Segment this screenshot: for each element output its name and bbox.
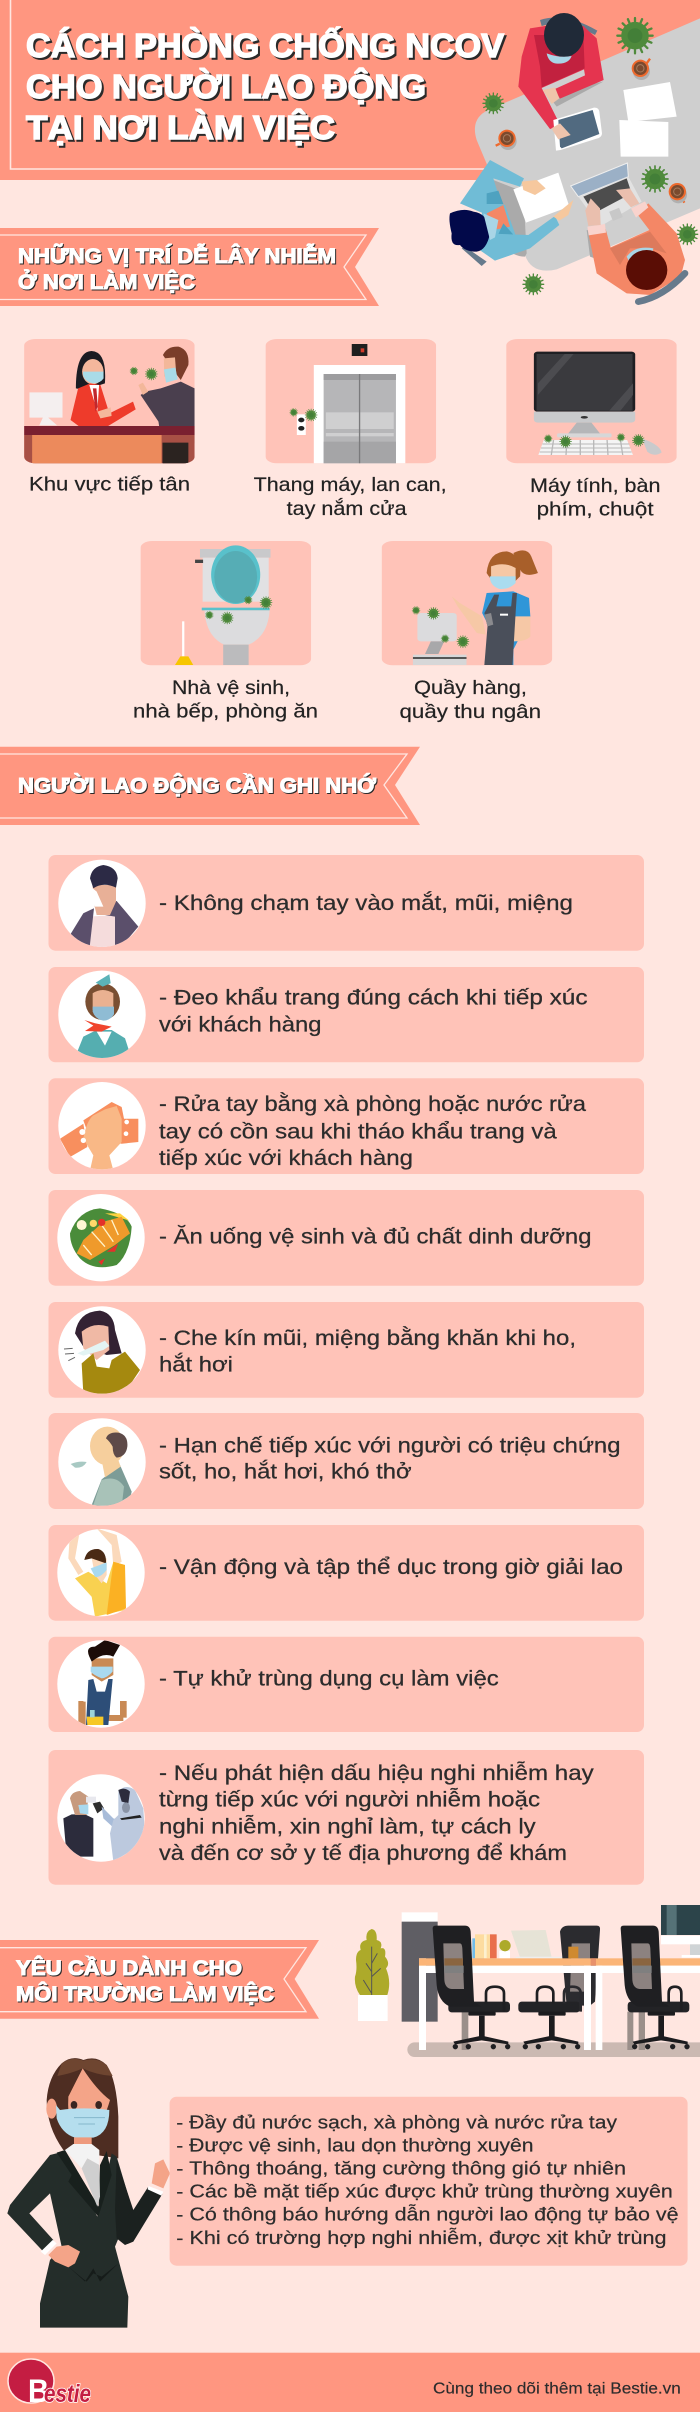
illustration: office desks and chairs [355, 1905, 700, 2057]
footer bar [0, 2353, 700, 2412]
advice text: hắt hơi [159, 1354, 233, 1377]
title: CÁCH PHÒNG CHỐNG NCOV [26, 26, 505, 65]
person in red [518, 13, 604, 151]
icon: man with breath cloud [71, 1427, 132, 1507]
panel: toilet [141, 541, 311, 665]
location captions: nhà bếp, phòng ăn [133, 701, 318, 723]
icon: woman sneezing into tissue [64, 1311, 140, 1394]
location captions: Thang máy, lan can, [254, 474, 447, 496]
ribbon heading: MÔI TRƯỜNG LÀM VIỆC [16, 1982, 274, 2006]
location captions: quầy thu ngân [400, 701, 541, 723]
logo: Bestie: estie [44, 2380, 91, 2408]
ribbon heading: Ở NƠI LÀM VIỆC [18, 270, 195, 294]
requirement list: - Khi có trường hợp nghi nhiễm, được xịt khử trùng [176, 2227, 667, 2248]
advice text: - Không chạm tay vào mắt, mũi, miệng [159, 892, 573, 915]
ribbon heading: NHỮNG VỊ TRÍ DỄ LÂY NHIỄM [18, 244, 336, 268]
reception monitor [29, 392, 62, 425]
receptionist [71, 351, 136, 427]
desk objects [472, 1930, 567, 1958]
advice text: sốt, ho, hắt hơi, khó thở [159, 1461, 412, 1484]
panel: workplace requirements [170, 2097, 688, 2266]
office monitor [661, 1905, 700, 1958]
icon: flight attendant with mask [77, 974, 129, 1063]
papers [619, 82, 677, 157]
requirement list: - Các bề mặt tiếp xúc được khử trùng thường xuyên [176, 2181, 673, 2202]
person in blue with document [449, 160, 573, 266]
panel: cashier [382, 541, 552, 665]
advice text: nghi nhiễm, xin nghỉ làm, tự cách ly [159, 1815, 536, 1838]
advice text: - Hạn chế tiếp xúc với người có triệu chứng [159, 1434, 620, 1457]
illustration: woman in suit with mask [7, 2058, 170, 2328]
ribbon heading [16, 1956, 274, 2006]
chair right [621, 1926, 690, 2049]
panel: computer [506, 339, 677, 463]
ribbon heading [18, 244, 336, 294]
advice text: - Tự khử trùng dụng cụ làm việc [159, 1668, 499, 1691]
section ribbon: workplace requirements [0, 1940, 319, 2019]
advice text: - Vận động và tập thể dục trong giờ giải lao [159, 1556, 623, 1579]
chair middle [518, 1987, 581, 2049]
advice text: - Che kín mũi, miệng bằng khăn khi ho, [159, 1327, 576, 1350]
advice text: - Ăn uống vệ sinh và đủ chất dinh dưỡng [159, 1225, 592, 1248]
icon: temperature check [63, 1787, 145, 1862]
advice text [159, 892, 623, 1865]
icon: worker disinfecting tools [78, 1640, 127, 1726]
advice text: từng tiếp xúc với người nhiễm hoặc [159, 1789, 540, 1812]
panel: elevator [266, 339, 436, 463]
location captions: Máy tính, bàn [530, 475, 660, 497]
icon: person exercising [68, 1528, 126, 1617]
logo: Bestie [8, 2359, 91, 2409]
advice text: tiếp xúc với khách hàng [159, 1147, 413, 1170]
icon: viruses around the table [483, 18, 698, 295]
title: CHO NGƯỜI LAO ĐỘNG [26, 67, 426, 106]
requirement list: - Thông thoáng, tăng cường thông gió tự nhiên [176, 2158, 626, 2179]
advice text: - Đeo khẩu trang đúng cách khi tiếp xúc [159, 986, 588, 1009]
icon: salad plate [70, 1208, 132, 1267]
advice text: với khách hàng [159, 1014, 322, 1037]
section ribbon: infection locations [0, 228, 379, 306]
panel: reception [24, 339, 195, 463]
advice text: - Rửa tay bằng xà phòng hoặc nước rửa [159, 1093, 586, 1116]
location captions: Khu vực tiếp tân [29, 474, 190, 496]
header banner [0, 0, 700, 180]
table [475, 18, 700, 271]
requirement list: - Có thông báo hướng dẫn người lao động tự bảo vệ [176, 2204, 679, 2225]
footer credit: Cùng theo dõi thêm tại Bestie.vn [433, 2380, 681, 2397]
icon: washing hands [60, 1102, 138, 1170]
advice text: và đến cơ sở y tế địa phương để khám [159, 1842, 567, 1865]
location captions: Nhà vệ sinh, [172, 677, 290, 699]
advice text: tay có cồn sau khi tháo khẩu trang và [159, 1120, 557, 1143]
ribbon heading: YÊU CẦU DÀNH CHO [16, 1956, 242, 1980]
far chair back [560, 1926, 600, 2006]
location captions: Quầy hàng, [414, 677, 527, 699]
icon: man touching face [70, 865, 138, 950]
advice text: - Nếu phát hiện dấu hiệu nghi nhiễm hay [159, 1762, 594, 1785]
requirement list: - Đầy đủ nước sạch, xà phòng và nước rửa tay [176, 2111, 618, 2132]
person in orange [585, 188, 685, 302]
advice circles [57, 860, 146, 1862]
icon: coffee cups [496, 59, 687, 203]
ribbon heading: NGƯỜI LAO ĐỘNG CẦN GHI NHỚ [18, 774, 376, 798]
title: TẠI NƠI LÀM VIỆC [26, 109, 335, 147]
title [26, 26, 505, 147]
visitor [138, 347, 195, 463]
location captions: phím, chuột [537, 499, 654, 521]
panel: advice list [48, 855, 644, 1885]
requirement list: - Được vệ sinh, lau dọn thường xuyên [176, 2135, 534, 2156]
location captions: tay nắm cửa [287, 497, 407, 520]
illustration: people at a meeting table [449, 13, 700, 302]
desk top [419, 1958, 700, 2050]
requirement list [176, 2111, 679, 2248]
plant [355, 1929, 389, 2021]
section ribbon: what workers should remember [0, 747, 420, 825]
advice card backgrounds [48, 855, 644, 1885]
chair left [433, 1926, 510, 2049]
location captions [29, 474, 660, 723]
logo: Bestie: B [28, 2373, 49, 2409]
laptop [571, 163, 642, 227]
